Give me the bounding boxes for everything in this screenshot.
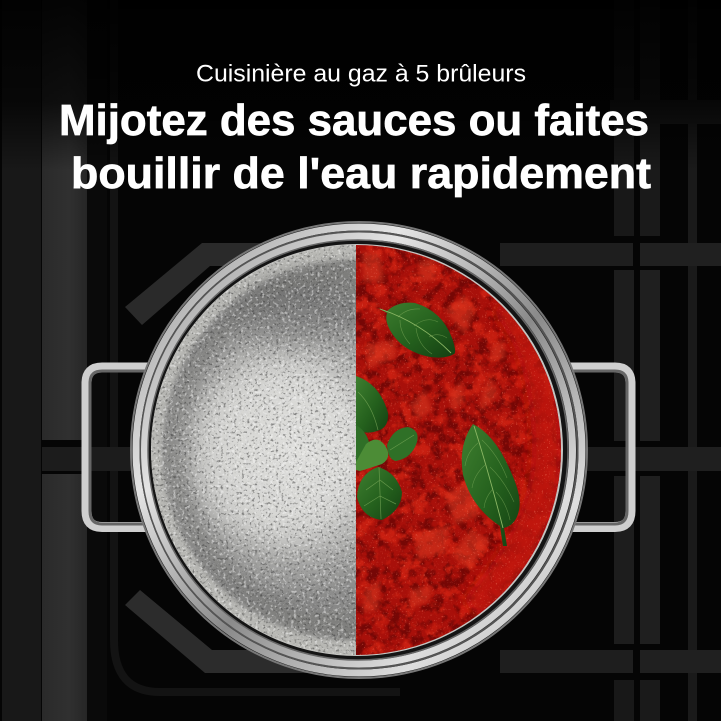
heading <box>59 96 651 198</box>
heading: Mijotez des sauces ou faites <box>59 96 649 145</box>
boiling water half <box>151 245 356 655</box>
basil leaves <box>356 303 520 546</box>
leaf: lower right <box>462 424 520 546</box>
heading: bouillir de l'eau rapidement <box>71 149 651 198</box>
leaf cluster: sprig at centre line <box>356 376 418 520</box>
subtitle: Cuisinière au gaz à 5 brûleurs <box>196 60 526 88</box>
tomato sauce half <box>356 245 562 655</box>
leaf: top <box>378 303 455 358</box>
pot <box>131 222 587 678</box>
pot handles <box>86 368 630 527</box>
